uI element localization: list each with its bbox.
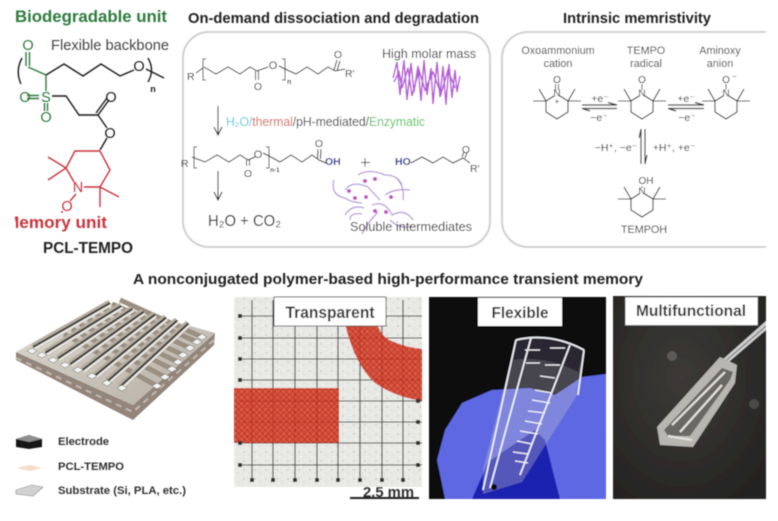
green sulfonyl and carbonyl structure: [26, 52, 48, 111]
caption: PCL-TEMPO: PCL-TEMPO: [43, 240, 133, 257]
heading: memory unit: Memory unit: [5, 213, 107, 232]
electrode pads: [27, 334, 207, 391]
equilibrium labels: −H⁺, −e⁻: [595, 142, 638, 154]
black atom labels: O: [133, 59, 145, 75]
polymer labels, second row: O: [254, 149, 263, 161]
panel frame: [502, 32, 778, 247]
photo: multifunctional: [613, 296, 766, 499]
top electrodes, bright edge: [34, 305, 190, 389]
red TEMPO ring: [48, 151, 119, 207]
green atom labels: [19, 38, 52, 126]
bottom section title: A nonconjugated polymer-based high-performance transient memory: [133, 272, 644, 288]
film electrode ticks: [513, 348, 565, 463]
bottom electrodes: [64, 300, 202, 386]
polymer labels, top: O: [334, 49, 342, 61]
legend: electrode: Electrode: [58, 436, 109, 448]
label: TEMPOH: TEMPOH: [621, 224, 667, 236]
top electrodes, dark edge: [33, 303, 188, 387]
molecule: oxoammonium cation: O: [553, 75, 561, 86]
black atom labels: n: [150, 84, 156, 94]
soluble fragments illustration: [333, 172, 413, 234]
molecule: aminoxy anion: O: [722, 75, 730, 86]
molecule: TEMPO radical: O: [638, 75, 646, 86]
grid lines: [240, 300, 422, 482]
state labels: Aminoxy: [699, 45, 741, 57]
polymer labels, second row: O: [462, 144, 470, 156]
panel: intrinsic memristivity: [502, 11, 778, 247]
polymer labels, second row: OH: [325, 156, 341, 168]
device on film: [657, 357, 737, 447]
polymer labels, top: O: [254, 81, 262, 93]
equilibrium labels: −e⁻: [678, 112, 696, 124]
label: multifunctional: [625, 297, 758, 326]
polymer labels, second row: [181, 138, 480, 180]
legend: PCL-TEMPO: PCL-TEMPO: [58, 461, 124, 473]
legend: electrode: [16, 435, 109, 449]
arrow: bottom reaction: [214, 171, 222, 200]
grid terminals: [238, 314, 420, 482]
green atom labels: S: [41, 90, 51, 106]
legend: PCL-TEMPO: [16, 461, 124, 473]
black atom labels: O: [105, 90, 117, 106]
polymer labels, top: O: [269, 60, 278, 72]
green atom labels: O: [19, 90, 31, 106]
label: soluble intermediates: Soluble intermediates: [350, 220, 472, 234]
arrow: top reaction: [214, 106, 222, 135]
state labels: anion: [707, 58, 733, 70]
label: flexible: Flexible: [492, 305, 548, 322]
equilibrium labels: +e⁻: [677, 93, 695, 105]
curved transparent film: [483, 339, 584, 494]
PCL-TEMPO strips: [33, 303, 188, 387]
green atom labels: O: [40, 110, 52, 126]
polymer labels, top: R: [187, 71, 195, 83]
state labels: Oxoammonium: [521, 45, 595, 57]
polymer labels, top: n: [287, 79, 291, 86]
tweezer tip: [723, 320, 767, 362]
red atom labels: O: [61, 199, 73, 215]
molecule: aminoxy anion: −: [732, 72, 737, 81]
state labels: cation: [544, 58, 572, 70]
molecule: TEMPO radical: N: [638, 88, 646, 100]
label: flexible backbone: Flexible backbone: [51, 38, 169, 54]
photo: transparent: [234, 297, 423, 501]
polymer structure, top: [196, 59, 345, 80]
label: transparent: [274, 297, 386, 326]
equilibrium labels: [590, 93, 696, 154]
device illustration: crossbar array: [16, 300, 215, 420]
state labels: [521, 45, 741, 70]
polymer labels, second row: R: [181, 158, 189, 170]
polymer labels, second row: O: [315, 138, 323, 150]
molecule: aminoxy anion: N: [722, 88, 730, 100]
molecule: oxoammonium cation: N: [553, 88, 561, 100]
black atom labels: O: [104, 126, 116, 142]
polymer labels, top: [187, 49, 355, 93]
polymer structure, second row: [192, 147, 470, 168]
molecule: TEMPO radical: [618, 75, 666, 119]
label: flexible: [478, 298, 562, 326]
label: transparent: Transparent: [286, 304, 375, 322]
polymer labels, top: R': [345, 68, 355, 80]
equilibrium labels: +H⁺, +e⁻: [653, 142, 696, 154]
glove shadow: [472, 430, 560, 499]
molecule: TEMPOH: [618, 176, 666, 217]
photo: flexible: [429, 297, 606, 499]
green atom labels: O: [22, 38, 34, 54]
black atom labels: [104, 59, 156, 142]
legend: substrate: Substrate (Si, PLA, etc.): [58, 485, 186, 497]
state labels: TEMPO: [627, 45, 665, 57]
polymer labels, second row: R': [470, 163, 480, 175]
polymer labels, second row: O: [244, 168, 252, 180]
heading: On-demand dissociation and degradation: [188, 11, 479, 27]
red atom labels: N: [73, 180, 83, 196]
panel frame: [183, 32, 490, 247]
purple high molar mass scribble: [393, 60, 460, 105]
blue glove: [437, 374, 606, 499]
panel: on-demand dissociation and degradation: [181, 11, 490, 247]
scale bar: 2.5 mm: [363, 485, 414, 501]
heading: biodegradable unit: Biodegradable unit: [15, 7, 167, 26]
red printed shapes seen through film: [234, 324, 423, 443]
substrate slab: [16, 333, 215, 420]
molecule: oxoammonium cation: [533, 75, 581, 119]
legend: [16, 435, 186, 497]
equilibrium labels: −e⁻: [590, 112, 608, 124]
reaction conditions: H₂O/thermal/pH-mediated/Enzymatic: [226, 114, 425, 129]
products: water and carbon dioxide: H₂O + CO₂: [208, 213, 281, 230]
state labels: radical: [630, 58, 662, 70]
polymer labels, second row: n-1: [270, 167, 280, 174]
panel: PCL-TEMPO molecule: [5, 7, 169, 257]
label: multifunctional: Multifunctional: [636, 303, 746, 320]
black backbone chain: [18, 58, 164, 150]
molecule: oxoammonium cation: +: [555, 97, 560, 106]
heading: Intrinsic memristivity: [563, 11, 712, 27]
film hole: [491, 484, 497, 490]
molecule: TEMPOH: N: [638, 186, 646, 198]
equilibrium arrows: [582, 102, 704, 164]
red atom labels: [61, 180, 83, 215]
molecule: aminoxy anion: [702, 72, 750, 119]
label: high molar mass: High molar mass: [382, 47, 476, 61]
equilibrium labels: +e⁻: [591, 93, 609, 105]
molecule: TEMPOH: OH: [638, 176, 654, 187]
polymer labels, second row: HO: [395, 156, 411, 168]
